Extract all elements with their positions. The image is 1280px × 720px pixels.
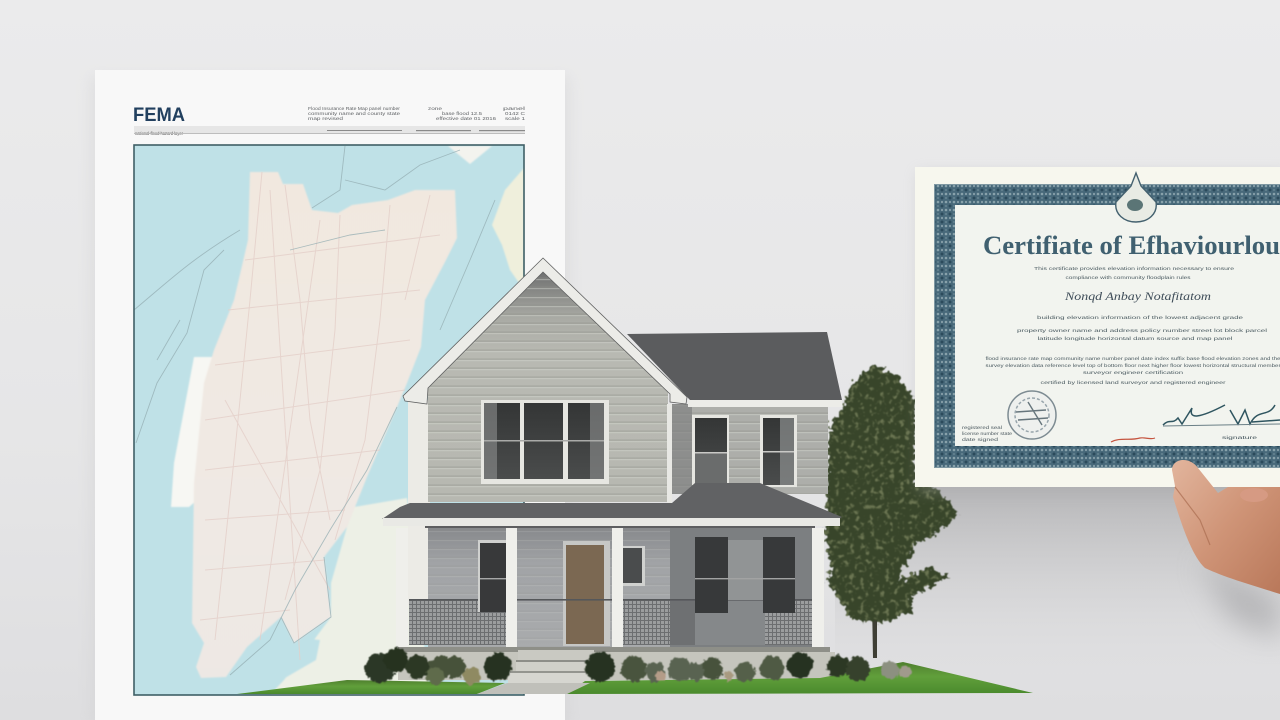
left lawn <box>237 680 505 694</box>
document header fine print: scale 1 <box>505 116 526 121</box>
knuckle under certificate <box>1240 488 1268 502</box>
finger crease <box>1175 487 1210 545</box>
certificate seal: registered seal <box>962 425 1002 430</box>
certificate seal: license number state <box>962 431 1013 436</box>
certificate fine print: surveyor engineer certification <box>1083 370 1184 376</box>
front steps <box>508 650 594 683</box>
certificate ornamental border <box>934 184 1280 468</box>
upper right wing wall <box>672 404 828 494</box>
signatures: signature <box>1222 435 1258 440</box>
certificate top crest <box>1116 173 1156 222</box>
logo: FEMA wordmark: FEMA <box>133 105 185 126</box>
document header fine print: zone <box>428 106 443 111</box>
lawn <box>237 662 1033 694</box>
right lawn <box>567 662 1033 694</box>
porch windows <box>478 537 795 613</box>
porch columns <box>396 528 824 648</box>
map land masses <box>171 146 524 695</box>
certificate fine print <box>986 266 1280 386</box>
certificate seal <box>962 391 1056 442</box>
large upper window <box>481 400 609 484</box>
certificate fine print: property owner name and address policy number street lot block parcel <box>1017 328 1267 334</box>
hand shadow <box>1200 560 1280 640</box>
shrubs <box>365 648 911 685</box>
house <box>382 258 842 683</box>
gable wall <box>428 272 672 503</box>
icon: hand holding certificate <box>1172 460 1280 640</box>
front door <box>563 541 610 646</box>
certificate fine print: survey elevation data reference level top of bottom floor next higher floor lowest horizontal structural member <box>986 363 1280 369</box>
tree <box>825 365 959 658</box>
porch floor and foundation <box>398 647 835 680</box>
house left white corner wall <box>408 400 430 605</box>
tree trunk <box>872 600 877 658</box>
certificate fine print: This certificate provides elevation information necessary to ensure <box>1034 266 1234 272</box>
upper right windows <box>692 415 797 487</box>
tree crown <box>825 365 959 624</box>
certificate fine print: flood insurance rate map community name number panel date index suffix base flood elevation zones and the <box>986 356 1280 362</box>
red signature <box>1111 438 1155 442</box>
porch railings <box>409 599 812 645</box>
porch back wall <box>428 526 812 648</box>
certificate seal: date signed <box>962 437 999 442</box>
document header fine print: effective date 01 2016 <box>436 116 497 121</box>
document header fine print: national flood hazard layer <box>135 131 183 136</box>
panel: flood map document <box>90 70 570 720</box>
document header fine print <box>134 106 526 136</box>
gable roof trim <box>403 258 687 404</box>
document header fine print: base flood 12.5 <box>442 111 483 116</box>
certificate fine print: compliance with community floodplain rules <box>1066 275 1191 281</box>
wall shadow under certificate <box>835 487 1280 677</box>
flood map <box>134 145 524 695</box>
certificate fine print: latitude longitude horizontal datum source and map panel <box>1038 336 1232 342</box>
document header fine print: community name and county state <box>308 111 401 116</box>
certificate title: Certifiate of Efhaviourlou <box>983 231 1280 260</box>
document header fine print: map revised <box>308 116 344 121</box>
certificate fine print: certified by licensed land surveyor and registered engineer <box>1040 380 1226 386</box>
certificate fine print: building elevation information of the lowest adjacent grade <box>1037 315 1244 321</box>
document header fine print: panel <box>503 106 525 111</box>
porch roof <box>382 483 842 528</box>
document header fine print: Flood Insurance Rate Map panel number <box>308 106 401 111</box>
right wing roof <box>627 332 842 407</box>
certificate name line: Nonqd Anbay Notafitatom <box>1064 289 1211 303</box>
document header fine print: 0142 C <box>505 111 525 116</box>
panel: elevation certificate <box>915 167 1280 492</box>
signatures <box>1163 405 1280 440</box>
map road network <box>200 172 440 660</box>
front walkway <box>477 683 590 694</box>
